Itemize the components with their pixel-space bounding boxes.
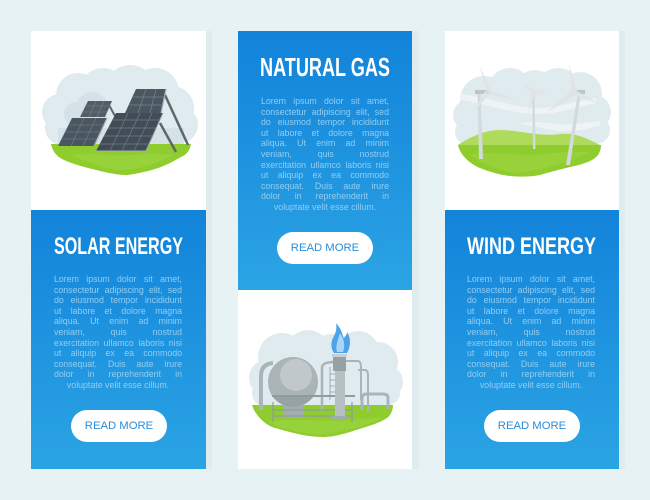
panel bbox=[80, 101, 115, 117]
turbine bbox=[473, 67, 519, 159]
panel: natural gas bbox=[238, 31, 419, 469]
flame bbox=[331, 323, 350, 353]
title: wind energy: WIND ENERGY bbox=[467, 233, 596, 260]
text block: solar energy: consectetur adipiscing elit, sed bbox=[54, 285, 182, 295]
button: gas read more: READ MORE bbox=[291, 242, 359, 254]
text block: natural gas: ut labore et dolore magna bbox=[261, 128, 389, 138]
text block: solar energy bbox=[54, 274, 182, 390]
button: gas read more bbox=[277, 232, 373, 264]
text block: wind energy bbox=[467, 274, 595, 390]
text block: wind energy: consectetur adipiscing elit, sed bbox=[467, 285, 595, 295]
tower bbox=[332, 354, 348, 420]
text block: wind energy: veniam, quis nostrud bbox=[467, 327, 595, 337]
text block: wind energy: do eiusmod tempor incididunt bbox=[467, 295, 595, 305]
panel bbox=[58, 118, 107, 146]
text block: wind energy: dolor in reprehenderit in bbox=[467, 369, 595, 379]
panel: solar energy bbox=[31, 31, 212, 469]
turbine bbox=[521, 82, 551, 149]
button: solar read more bbox=[71, 410, 167, 442]
text block: solar energy: exercitation ullamco laboris nisi bbox=[54, 338, 182, 348]
text block: natural gas: voluptate velit esse cillum. bbox=[274, 202, 376, 212]
title: natural gas: NATURAL GAS bbox=[260, 52, 390, 82]
button: wind read more bbox=[484, 410, 580, 442]
text block: wind energy: aliqua. Ut enim ad minim bbox=[467, 316, 595, 326]
text block: wind energy: Lorem ipsum dolor sit amet, bbox=[467, 274, 595, 284]
text block: natural gas: dolor in reprehenderit in bbox=[261, 191, 389, 201]
spherical tank bbox=[268, 357, 318, 418]
title: solar energy: SOLAR ENERGY bbox=[54, 233, 183, 260]
text block: natural gas: veniam, quis nostrud bbox=[261, 149, 389, 159]
button: wind read more: READ MORE bbox=[498, 420, 566, 432]
button: solar read more: READ MORE bbox=[85, 420, 153, 432]
text block: wind energy: exercitation ullamco laboris nisi bbox=[467, 338, 595, 348]
text block: wind energy: voluptate velit esse cillum. bbox=[480, 380, 582, 390]
text block: natural gas: consectetur adipiscing elit, sed bbox=[261, 107, 389, 117]
text block: wind energy: ut labore et dolore magna bbox=[467, 306, 595, 316]
text block: wind energy: consequat. Duis aute irure bbox=[467, 359, 595, 369]
text block: natural gas: do eiusmod tempor incididunt bbox=[261, 117, 389, 127]
text block: natural gas: Lorem ipsum dolor sit amet, bbox=[261, 96, 389, 106]
text block: solar energy: veniam, quis nostrud bbox=[54, 327, 182, 337]
platform and fence bbox=[272, 367, 355, 422]
text block: solar energy: do eiusmod tempor incididunt bbox=[54, 295, 182, 305]
turbine bbox=[547, 64, 598, 165]
text block: solar energy: consequat. Duis aute irure bbox=[54, 359, 182, 369]
text block: wind energy: ut aliquip ex ea commodo bbox=[467, 348, 595, 358]
text block: solar energy: voluptate velit esse cillum. bbox=[67, 380, 169, 390]
text block: natural gas: aliqua. Ut enim ad minim bbox=[261, 138, 389, 148]
panel bbox=[96, 113, 176, 152]
text block: solar energy: Lorem ipsum dolor sit amet, bbox=[54, 274, 182, 284]
text block: natural gas: exercitation ullamco laboris nisi bbox=[261, 160, 389, 170]
pipes bbox=[261, 361, 388, 412]
text block: solar energy: dolor in reprehenderit in bbox=[54, 369, 182, 379]
panel: wind energy bbox=[445, 31, 625, 469]
text block: natural gas bbox=[261, 96, 389, 212]
text block: solar energy: aliqua. Ut enim ad minim bbox=[54, 316, 182, 326]
panel bbox=[125, 89, 188, 145]
text block: natural gas: consequat. Duis aute irure bbox=[261, 181, 389, 191]
text block: solar energy: ut labore et dolore magna bbox=[54, 306, 182, 316]
text block: natural gas: ut aliquip ex ea commodo bbox=[261, 170, 389, 180]
text block: solar energy: ut aliquip ex ea commodo bbox=[54, 348, 182, 358]
